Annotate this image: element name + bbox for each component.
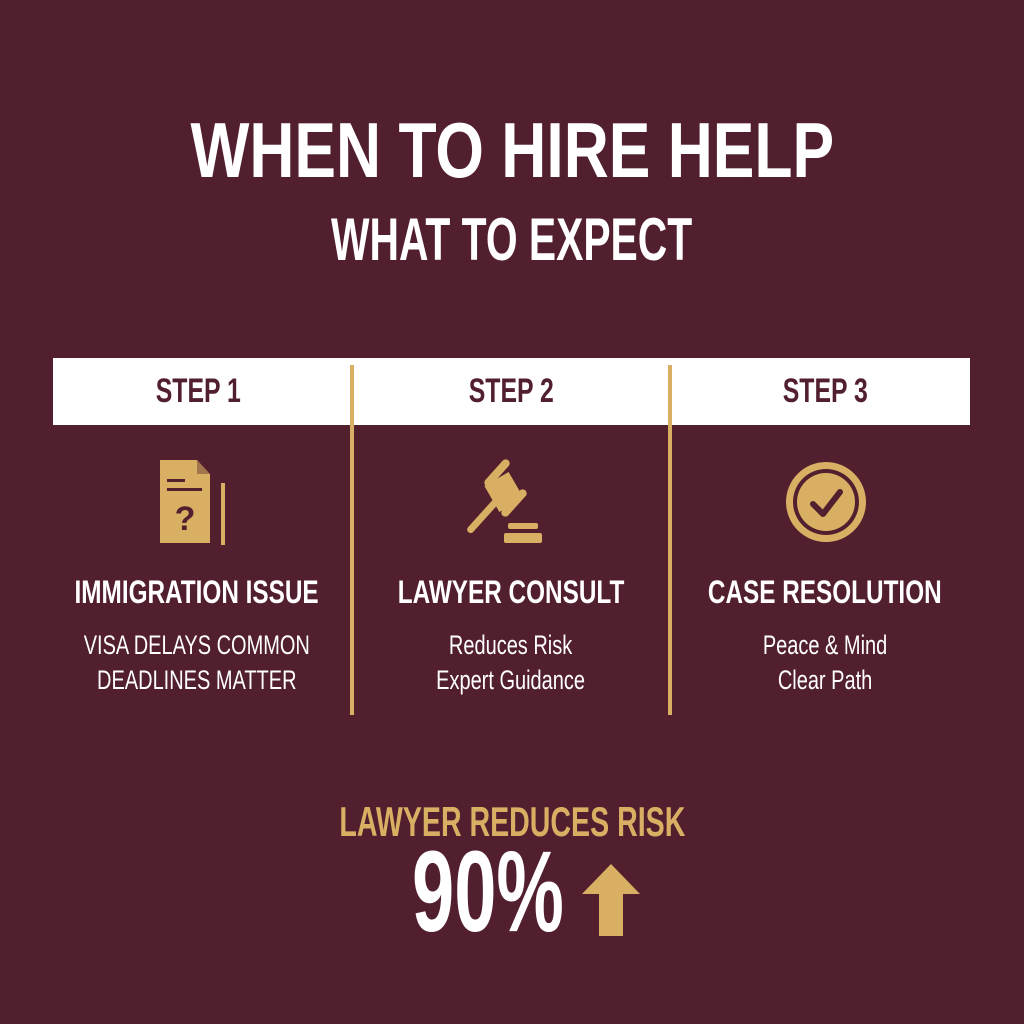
column 2 text — [398, 574, 624, 695]
stat heading: LAWYER REDUCES RISK — [339, 798, 685, 845]
column 3 text: Peace & Mind — [763, 630, 887, 660]
title: WHEN TO HIRE HELP — [190, 106, 834, 194]
icon: check circle — [786, 462, 866, 542]
step 3 label: STEP 3 — [782, 372, 868, 410]
icon: up arrow — [582, 864, 640, 936]
step 1 label: STEP 1 — [155, 372, 241, 410]
step 2 label: STEP 2 — [468, 372, 554, 410]
column 3 text: CASE RESOLUTION — [708, 574, 942, 610]
column 2 text: LAWYER CONSULT — [398, 574, 624, 610]
step header bar — [53, 358, 970, 425]
column 1 text: DEADLINES MATTER — [97, 665, 297, 695]
stat number: 90% — [412, 828, 564, 956]
column 2 text: Expert Guidance — [437, 665, 585, 695]
icon: document question — [160, 460, 225, 545]
column 1 text: IMMIGRATION ISSUE — [75, 574, 319, 610]
subtitle: WHAT TO EXPECT — [331, 206, 693, 273]
column 3 text: Clear Path — [778, 665, 872, 695]
column 2 text: Reduces Risk — [449, 630, 573, 660]
column 1 text: VISA DELAYS COMMON — [84, 630, 310, 660]
column 3 text — [708, 574, 942, 695]
column 1 text — [75, 574, 319, 695]
icon: document question: ? — [175, 500, 195, 538]
icon: gavel — [467, 459, 542, 543]
